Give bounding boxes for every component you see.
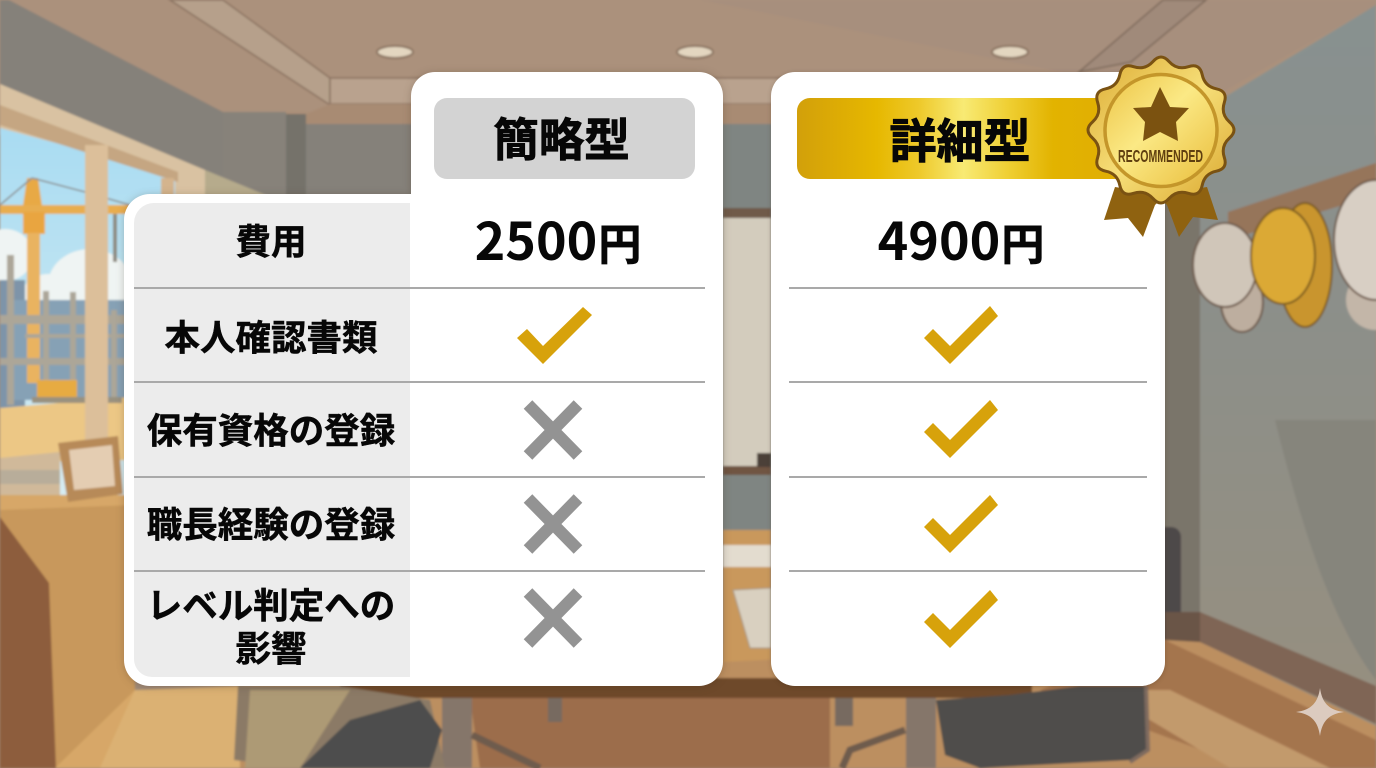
left desk xyxy=(0,495,135,768)
icon: recommended badge: RECOMMENDED xyxy=(1118,146,1203,166)
baseboard xyxy=(1200,612,1376,724)
ceiling xyxy=(0,0,1376,135)
icon: recommended badge xyxy=(1086,56,1236,237)
upper left gray wall xyxy=(0,0,223,204)
crane xyxy=(22,178,43,212)
row label: cost: 費用 xyxy=(235,214,306,265)
icon: cross basic qualifications xyxy=(524,400,582,460)
icon: check detailed experience xyxy=(924,495,998,553)
row label: level assessment impact xyxy=(147,578,395,672)
sill xyxy=(0,452,60,498)
picture frame xyxy=(58,436,123,502)
icon: cross basic level xyxy=(524,588,582,648)
back wall xyxy=(306,124,1206,644)
pillar xyxy=(223,112,286,204)
table xyxy=(340,678,1032,698)
whiteboard region xyxy=(723,209,771,467)
heading box: basic plan xyxy=(434,98,695,179)
icon: check detailed identity xyxy=(924,306,998,364)
back desk xyxy=(723,530,771,685)
row label: level assessment impact: レベル判定への xyxy=(147,578,395,629)
hat rack xyxy=(1228,163,1376,240)
panel: row label column xyxy=(134,203,410,677)
row label: identity documents: 本人確認書類 xyxy=(164,310,378,361)
window frame xyxy=(85,145,108,445)
row label: work experience: 職長経験の登録 xyxy=(147,497,395,548)
steel frame xyxy=(0,255,130,405)
window xyxy=(0,84,205,205)
hard hats xyxy=(1221,272,1263,332)
price: detailed: 4900円 xyxy=(878,200,1044,275)
right chair xyxy=(936,686,1148,768)
row label: qualifications: 保有資格の登録 xyxy=(147,403,395,454)
right chair back xyxy=(1150,527,1181,640)
icon: check basic identity xyxy=(517,307,592,364)
floor xyxy=(240,640,1376,768)
panel: basic plan card with row labels xyxy=(120,70,726,690)
heading text: basic plan: 簡略型 xyxy=(493,104,630,170)
panel: detailed plan card xyxy=(771,72,1165,686)
ground xyxy=(0,397,130,462)
heading box: detailed plan xyxy=(797,98,1117,179)
icon: sparkle xyxy=(1296,688,1344,736)
left chair xyxy=(234,686,445,768)
row divider lines xyxy=(134,287,1147,572)
icon: cross basic experience xyxy=(524,494,582,554)
heading text: detailed plan: 詳細型 xyxy=(890,103,1030,172)
clouds xyxy=(0,229,33,281)
row label: level assessment impact: 影響 xyxy=(235,621,306,672)
icon: check detailed qualifications xyxy=(924,400,998,458)
buildings xyxy=(0,280,25,410)
icon: check detailed level xyxy=(924,590,998,648)
right wall xyxy=(1200,5,1376,768)
price: basic: 2500円 xyxy=(475,200,641,275)
